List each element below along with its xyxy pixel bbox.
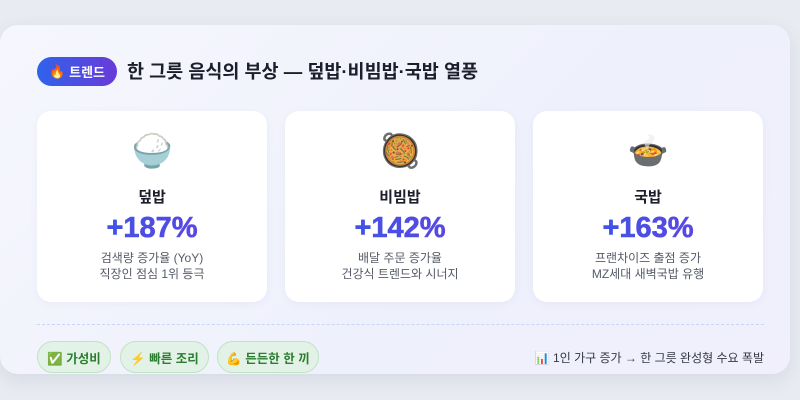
title: 한 그릇 음식의 부상 — 덮밥·비빔밥·국밥 열풍	[127, 61, 478, 82]
tag: quick cook: ⚡ 빠른 조리	[130, 352, 199, 366]
icon: rice bowl: 🍚	[131, 132, 173, 169]
tag: value	[37, 341, 111, 373]
card name: 국밥	[634, 189, 662, 206]
icon: shallow pan: 🥘	[379, 132, 421, 169]
stat	[533, 210, 763, 246]
description: 건강식 트렌드와 시너지	[341, 267, 459, 281]
description	[341, 251, 459, 281]
description: MZ세대 새벽국밥 유행	[592, 267, 704, 281]
stat: +142%	[354, 212, 446, 244]
tag: value: ✅ 가성비	[47, 352, 101, 366]
badge: trend: 트렌드	[69, 65, 105, 80]
tag: quick cook	[120, 341, 209, 373]
card: 덮밥	[37, 111, 267, 302]
description: 배달 주문 증가율	[358, 251, 442, 265]
description: 프랜차이즈 출점 증가	[595, 251, 701, 265]
card: 국밥	[533, 111, 763, 302]
stat	[285, 210, 515, 246]
icon: soup bowl: 🍲	[627, 132, 669, 169]
card name: 비빔밥	[379, 189, 421, 206]
badge: trend	[37, 57, 117, 86]
footer note: 📊 1인 가구 증가 → 한 그릇 완성형 수요 폭발	[535, 351, 764, 365]
description	[100, 251, 204, 281]
description	[592, 251, 704, 281]
description: 검색량 증가율 (YoY)	[101, 251, 203, 265]
tag: hearty	[217, 341, 319, 373]
stat: +163%	[602, 212, 694, 244]
tag: hearty: 💪 든든한 한 끼	[226, 352, 310, 366]
description: 직장인 점심 1위 등극	[100, 267, 204, 281]
stat	[37, 210, 267, 246]
card: 비빔밥	[285, 111, 515, 302]
card name: 덮밥	[138, 189, 166, 206]
badge: trend: 🔥	[49, 64, 65, 78]
stat: +187%	[106, 212, 198, 244]
